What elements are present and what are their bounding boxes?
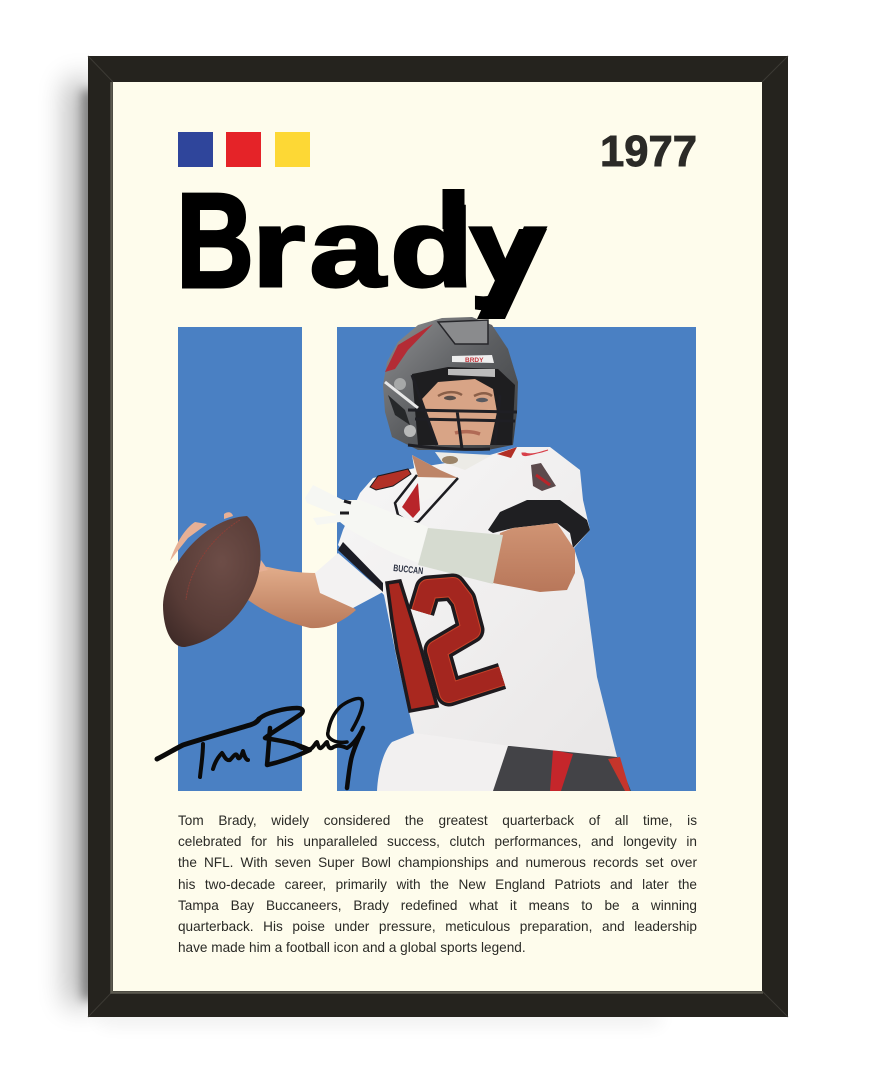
- picture frame: [88, 56, 788, 1017]
- collar: [395, 475, 458, 523]
- throwing arm: [248, 566, 356, 628]
- chin strap: [435, 452, 492, 470]
- facemask: [408, 375, 517, 449]
- blue background panels: [178, 327, 696, 791]
- facial features: [438, 392, 492, 434]
- title: [176, 165, 548, 316]
- biography text block: quarterback. His poise under pressure, meticulous preparation, and leadership: [178, 919, 697, 934]
- face: [422, 379, 497, 445]
- biography text block: have made him a football icon and a global sports legend.: [178, 940, 526, 955]
- wordmark: BUCCAN: [393, 563, 424, 577]
- biography text block: celebrated for his unparalleled success, clutch performances, and longevity in: [178, 834, 697, 849]
- throwing hand fingers: [170, 512, 268, 572]
- poster paper: [113, 82, 762, 991]
- biography text block: [178, 813, 697, 955]
- helmet details: [385, 320, 495, 437]
- title letter extensions: [442, 189, 547, 319]
- undershirt: [412, 455, 458, 503]
- number 12: [387, 581, 502, 711]
- helmet opening: [412, 367, 515, 445]
- forearm: [493, 523, 575, 592]
- nike swoosh and team crest: [522, 450, 556, 491]
- biography text block: Tampa Bay Buccaneers, Brady redefined what it means to be a winning: [178, 898, 697, 913]
- biography text block: the NFL. With seven Super Bowl championships and numerous records set over: [178, 855, 697, 870]
- biography text block: his two-decade career, primarily with the New England Patriots and later the: [178, 877, 697, 892]
- sleeve: [315, 553, 383, 608]
- football: [163, 516, 260, 647]
- helmet details: BRDY: [465, 357, 484, 364]
- title: rady: [252, 187, 545, 310]
- colour swatches: [178, 132, 310, 167]
- biography text block: Tom Brady, widely considered the greatest quarterback of all time, is: [178, 813, 697, 828]
- jersey: [338, 447, 617, 757]
- player photo illustration: [163, 317, 631, 791]
- right shoulder number: [497, 447, 517, 458]
- helmet shell: [383, 317, 518, 450]
- sleeve stripe: [338, 542, 383, 592]
- sleeve stripe right: [488, 500, 590, 548]
- year: 1977: [600, 127, 697, 176]
- shoulder number: [370, 469, 411, 490]
- signature: [157, 698, 363, 788]
- title: B: [176, 165, 254, 316]
- glove: [305, 485, 428, 563]
- pants: [377, 732, 631, 791]
- wrist tape: [418, 528, 503, 584]
- frame drop shadow: [66, 80, 660, 1024]
